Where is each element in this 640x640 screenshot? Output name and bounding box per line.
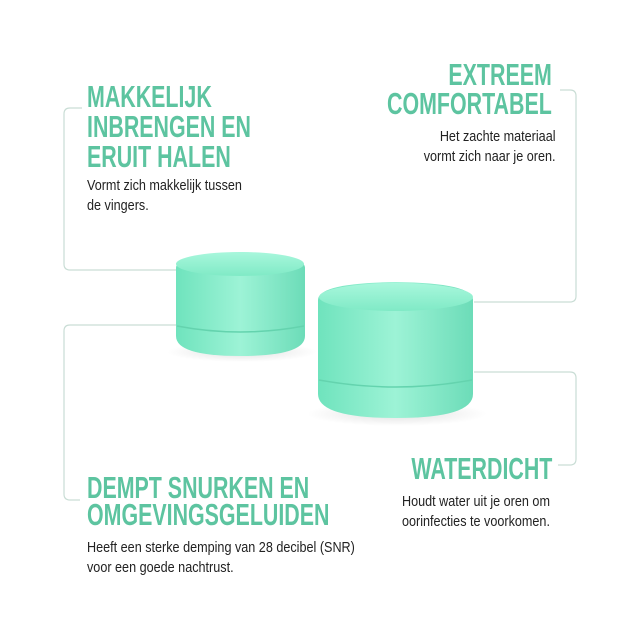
earplug left [167,342,317,362]
text: waterdicht: Houdt water uit je oren om [402,494,550,510]
heading: dempt: OMGEVINGSGELUIDEN [87,497,329,532]
heading: makkelijk [87,79,251,174]
text: makkelijk: Vormt zich makkelijk tussen [87,178,242,194]
text: waterdicht [402,494,550,530]
text: makkelijk [87,178,242,214]
text: dempt: Heeft een sterke demping van 28 decibel (SNR) [87,540,355,556]
text: dempt [87,540,355,576]
text: makkelijk: de vingers. [87,198,149,214]
heading: comfortabel: COMFORTABEL [387,86,552,121]
text: comfortabel [424,129,556,165]
earplug right [307,402,487,426]
heading: comfortabel: EXTREEM [449,57,552,92]
heading: comfortabel [387,57,552,121]
heading: dempt [87,470,329,532]
heading: waterdicht: WATERDICHT [411,451,552,486]
text: waterdicht: oorinfecties te voorkomen. [402,514,550,530]
text: comfortabel: Het zachte materiaal [440,129,556,145]
text: dempt: voor een goede nachtrust. [87,560,234,576]
heading: makkelijk: INBRENGEN EN [87,109,251,144]
text: comfortabel: vormt zich naar je oren. [424,149,556,165]
heading: dempt: DEMPT SNURKEN EN [87,470,309,505]
heading: makkelijk: ERUIT HALEN [87,139,231,174]
heading: makkelijk: MAKKELIJK [87,79,212,114]
